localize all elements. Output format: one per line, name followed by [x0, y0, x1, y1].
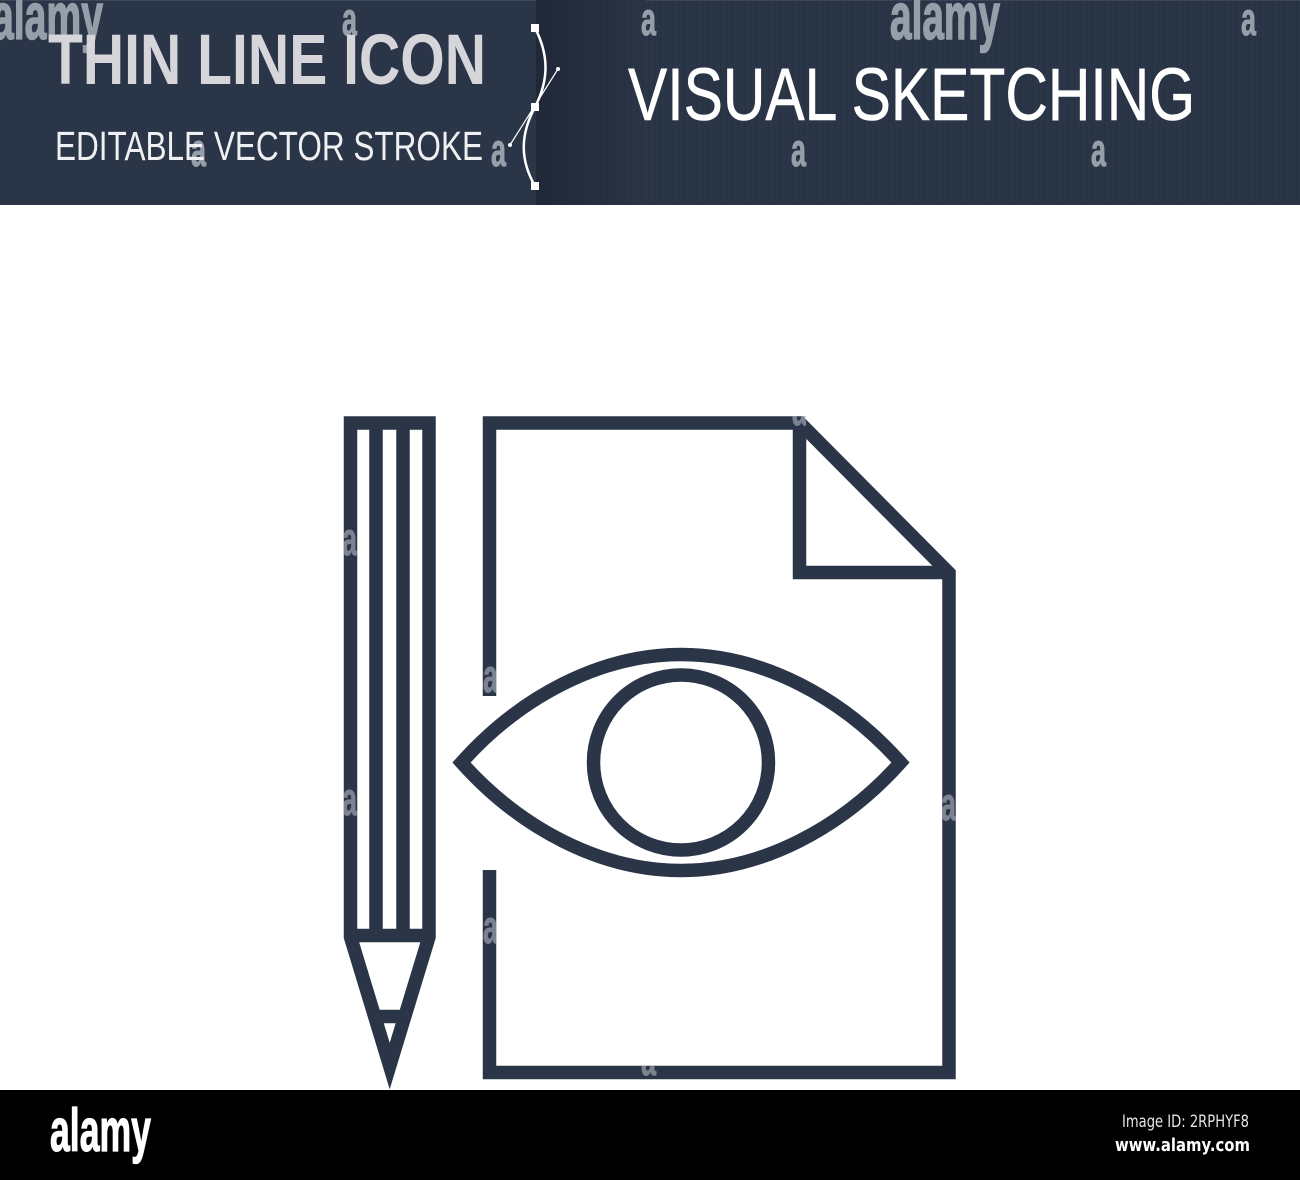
- footer image id and website: Image ID: 2RPHYF8: [1122, 1112, 1249, 1132]
- icon watermarks: a: [941, 778, 956, 830]
- footer logo: alamy: alamy: [50, 1097, 151, 1164]
- icon watermarks: a: [641, 1033, 656, 1085]
- footer image id and website: www.alamy.com: [1115, 1135, 1250, 1156]
- subheading: editable vector stroke: EDITABLE VECTOR STROKE: [55, 123, 483, 169]
- header watermarks: a: [791, 124, 806, 176]
- header watermarks: a: [491, 124, 506, 176]
- header watermarks: [0, 0, 1256, 176]
- footer image id and website: [1115, 1112, 1250, 1156]
- header banner: [0, 0, 1300, 205]
- icon watermarks: a: [792, 383, 807, 435]
- icon watermarks: a: [342, 773, 357, 825]
- icon watermarks: a: [342, 513, 357, 565]
- heading: thin line icon: THIN LINE ICON: [48, 21, 486, 100]
- header watermarks: a: [1091, 124, 1106, 176]
- footer bar: [0, 1090, 1300, 1180]
- icon: eye: [462, 654, 900, 870]
- icon watermarks: [342, 383, 956, 1085]
- header watermarks: a: [191, 124, 206, 176]
- icon: document with folded corner: [490, 423, 949, 1072]
- icon: bezier curve handles: [508, 24, 560, 190]
- icon watermarks: a: [483, 650, 498, 702]
- icon: pencil: [350, 423, 429, 1066]
- icon watermarks: a: [483, 901, 498, 953]
